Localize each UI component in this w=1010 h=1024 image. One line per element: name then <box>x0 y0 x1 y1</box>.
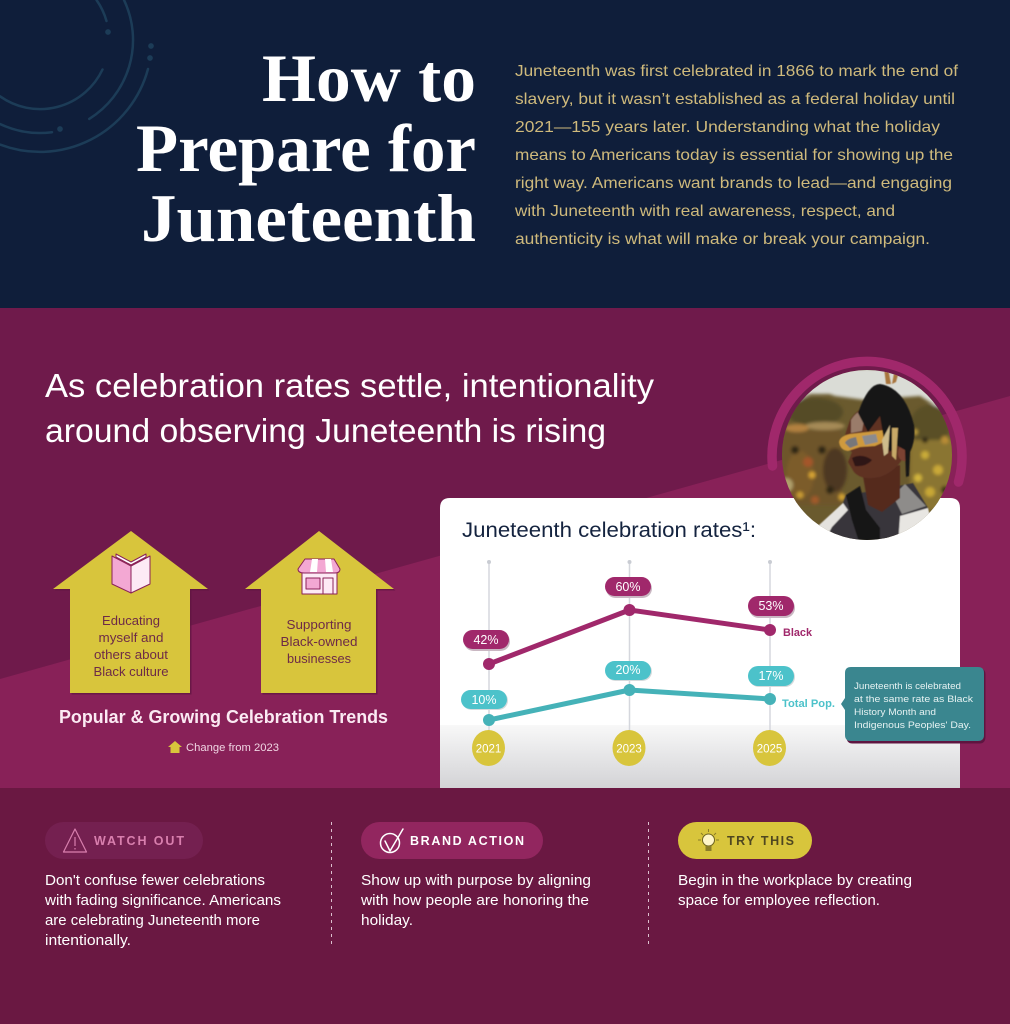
house text: Supporting <box>286 617 352 632</box>
icon: check mark <box>380 829 403 852</box>
legend: change from 2023: Change from 2023 <box>186 742 279 754</box>
house text: Black-owned <box>280 634 358 649</box>
body text <box>678 873 912 909</box>
intro text: authenticity is what will make or break your campaign. <box>515 231 930 248</box>
intro text: with Juneteenth with real awareness, respect, and <box>514 203 895 220</box>
body text: are celebrating Juneteenth more <box>45 913 260 929</box>
panel: celebration rates <box>0 308 1010 790</box>
body text: space for employee reflection. <box>678 893 880 909</box>
section heading: As celebration rates settle, intentionality <box>45 367 655 404</box>
house text <box>280 617 358 666</box>
house text: Educating <box>102 613 160 628</box>
try this column <box>678 822 912 909</box>
badge: watch out: WATCH OUT <box>94 834 184 848</box>
callout: same rate: at the same rate as Black <box>854 694 973 705</box>
callout: same rate <box>841 667 986 744</box>
icon: light bulb <box>698 829 719 851</box>
intro text: right way. Americans want brands to lead—and engaging <box>515 175 952 192</box>
body text: Begin in the workplace by creating <box>678 873 912 889</box>
badge: brand action: BRAND ACTION <box>410 834 524 848</box>
badge: try this: TRY THIS <box>727 834 794 848</box>
house: educating <box>53 531 210 694</box>
icon: warning triangle <box>64 829 86 852</box>
section heading <box>45 367 655 449</box>
callout: same rate: History Month and <box>854 707 936 718</box>
section heading: around observing Juneteenth is rising <box>45 412 606 449</box>
year markers <box>472 730 786 766</box>
intro text <box>514 63 959 248</box>
icon: storefront <box>298 559 340 594</box>
house: supporting <box>245 531 396 694</box>
series: Black: 53% <box>758 599 784 613</box>
callout: same rate: Indigenous Peoples' Day. <box>854 720 971 731</box>
series: Total Pop.: 10% <box>471 693 497 707</box>
badge: watch out <box>45 822 203 859</box>
chart title: Juneteenth celebration rates¹: <box>462 519 756 542</box>
house text: businesses <box>287 651 351 666</box>
body text: with how people are honoring the <box>360 893 589 909</box>
decorative concentric rings <box>0 0 153 152</box>
glasses <box>839 430 888 451</box>
series: Black: 42% <box>473 633 499 647</box>
series: Total Pop.: Total Pop. <box>782 698 835 710</box>
house text <box>94 613 168 679</box>
house text: others about <box>94 647 168 662</box>
icon: open book <box>112 554 150 593</box>
body text <box>360 873 591 929</box>
house text: Black culture <box>94 664 168 679</box>
year markers: 2023 <box>616 744 642 756</box>
panel: recommendations <box>0 788 1010 1024</box>
title <box>136 40 476 256</box>
callout: same rate: Juneteenth is celebrated <box>854 681 961 692</box>
title: How to <box>262 40 476 116</box>
body text <box>44 873 281 949</box>
portrait photo <box>779 368 955 545</box>
hair <box>858 384 914 477</box>
chart card <box>440 498 960 788</box>
series: Black: Black <box>783 627 813 639</box>
body text: Don't confuse fewer celebrations <box>45 873 265 889</box>
portrait ring <box>772 361 962 482</box>
series: Total Pop.: 20% <box>615 663 641 677</box>
year markers: 2021 <box>476 744 501 756</box>
watch out column <box>44 822 281 949</box>
brand action column <box>360 822 591 929</box>
year markers: 2025 <box>757 744 782 756</box>
intro text: slavery, but it wasn’t established as a federal holiday until <box>515 91 955 108</box>
house text: myself and <box>98 630 164 645</box>
intro text: 2021—155 years later. Understanding what the holiday <box>515 119 940 136</box>
line chart <box>461 560 835 766</box>
trends heading: Popular & Growing Celebration Trends <box>59 707 388 727</box>
neck <box>863 465 900 512</box>
body text: Show up with purpose by aligning <box>361 873 591 889</box>
series: Total Pop.: 17% <box>758 669 784 683</box>
face <box>845 411 902 478</box>
header panel <box>0 0 1010 308</box>
body text: with fading significance. Americans <box>44 893 281 909</box>
title: Juneteenth <box>141 180 476 256</box>
badge: try this <box>678 822 812 859</box>
series: Black <box>463 577 813 670</box>
series: Black: 60% <box>615 580 641 594</box>
body text: intentionally. <box>45 933 131 949</box>
jacket <box>829 482 928 540</box>
body text: holiday. <box>361 913 413 929</box>
badge: brand action <box>361 822 543 859</box>
intro text: means to Americans today is essential for showing up the <box>515 147 953 164</box>
intro text: Juneteenth was first celebrated in 1866 to mark the end of <box>515 63 959 80</box>
series: Total Pop. <box>461 661 835 726</box>
title: Prepare for <box>136 110 476 186</box>
